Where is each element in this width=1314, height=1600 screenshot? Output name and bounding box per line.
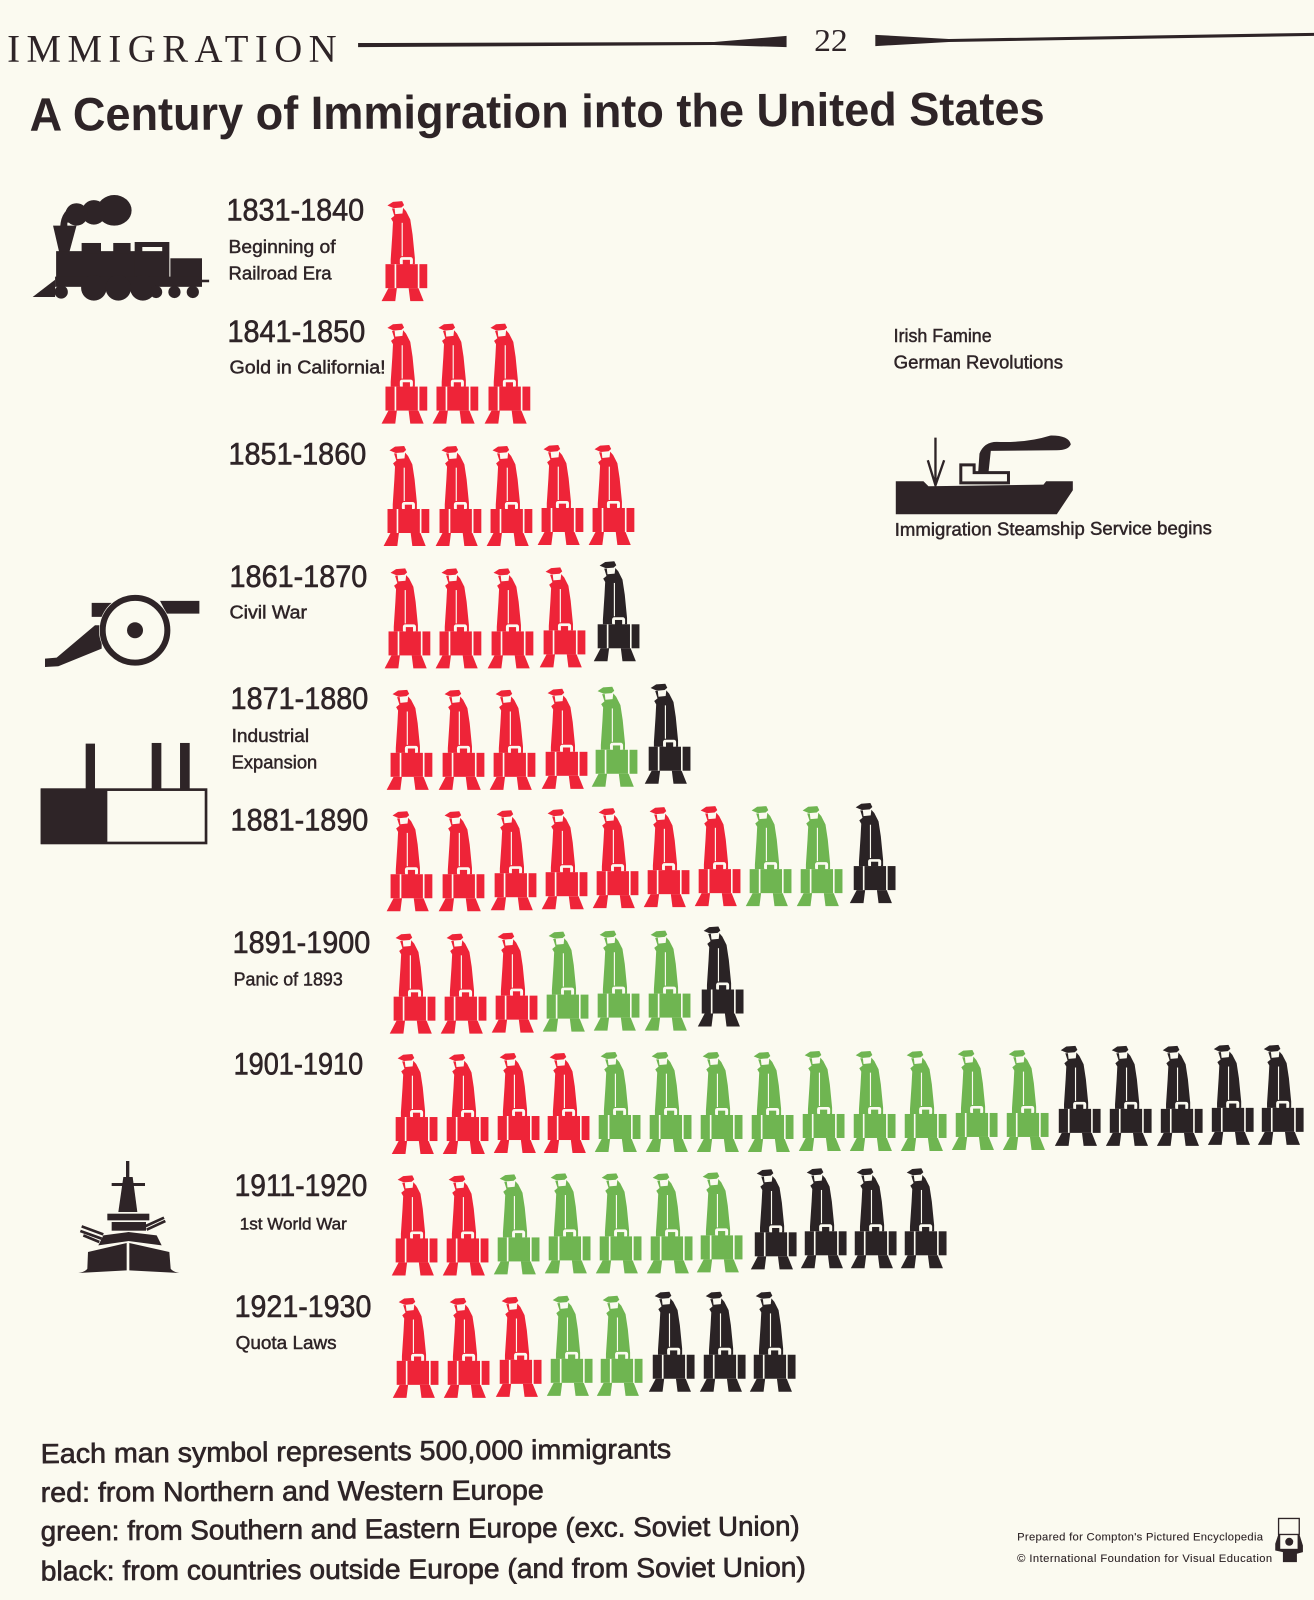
row 1831-1840: [226, 192, 427, 301]
legend line: black: black: from countries outside Europe (and from Soviet Union): [41, 1551, 806, 1586]
icon: battleship: [78, 1161, 179, 1273]
men: [392, 1168, 947, 1275]
credit line 2: © International Foundation for Visual Education: [1017, 1553, 1272, 1565]
header rule right: [875, 33, 1314, 46]
icon: factory: [41, 743, 206, 844]
legend: [41, 1433, 806, 1586]
row 1901-1910: [234, 1045, 1304, 1154]
event note: 1st World War: [240, 1215, 347, 1233]
men: [382, 324, 530, 424]
event note: Gold in California!: [230, 357, 386, 378]
event note line 2: Railroad Era: [229, 263, 332, 284]
period label: 1831-1840: [226, 192, 364, 228]
period label: 1881-1890: [231, 802, 368, 838]
legend line: green: green: from Southern and Eastern Europe (exc. Soviet Union): [41, 1510, 800, 1547]
period label: 1891-1900: [233, 924, 370, 960]
annotation: German Revolutions: German Revolutions: [894, 351, 1063, 372]
period label: 1921-1930: [235, 1288, 371, 1324]
men: [387, 803, 896, 911]
row 1861-1870: [230, 558, 639, 668]
header rule left: [358, 36, 787, 47]
period label: 1911-1920: [235, 1167, 367, 1203]
men: [387, 684, 690, 790]
icon: cannon: [45, 594, 199, 667]
title: A Century of Immigration into the United States: [29, 83, 1045, 141]
annotation: steamship service: Immigration Steamship Service begins: [895, 517, 1212, 540]
row 1881-1890: [231, 802, 896, 911]
page number: 22: [814, 23, 848, 58]
icon: locomotive: [33, 195, 209, 301]
row 1891-1900: [233, 924, 744, 1034]
period label: 1841-1850: [228, 313, 365, 349]
period label: 1901-1910: [234, 1045, 363, 1081]
credit line 1: Prepared for Compton's Pictured Encyclopedia: [1017, 1532, 1264, 1544]
men: [390, 927, 744, 1034]
event note line 2: Expansion: [232, 751, 317, 772]
men: [382, 201, 427, 301]
men: [393, 1292, 796, 1398]
annotation: Irish Famine: Irish Famine: [894, 325, 992, 346]
legend line: scale: Each man symbol represents 500,000 immigrants: [41, 1433, 671, 1469]
icon: steamship: [896, 436, 1073, 514]
men: [384, 445, 634, 546]
icon: publisher mark: [1275, 1518, 1303, 1562]
row 1921-1930: [235, 1288, 796, 1398]
period label: 1861-1870: [230, 558, 367, 594]
men: [385, 561, 639, 668]
section header: IMMIGRATION: IMMIGRATION: [7, 27, 337, 70]
legend line: red: red: from Northern and Western Europe: [41, 1474, 544, 1508]
event note: Beginning of: [229, 236, 337, 257]
row 1871-1880: [231, 680, 690, 790]
row 1841-1850: [228, 313, 530, 424]
event note: Civil War: [230, 601, 307, 622]
event note: Industrial: [232, 725, 309, 746]
period label: 1871-1880: [231, 680, 368, 716]
row 1851-1860: [229, 435, 634, 546]
row 1911-1920: [235, 1167, 947, 1275]
period label: 1851-1860: [229, 435, 366, 471]
event note: Panic of 1893: [234, 969, 343, 990]
event note: Quota Laws: [236, 1332, 337, 1353]
men: [392, 1045, 1304, 1154]
